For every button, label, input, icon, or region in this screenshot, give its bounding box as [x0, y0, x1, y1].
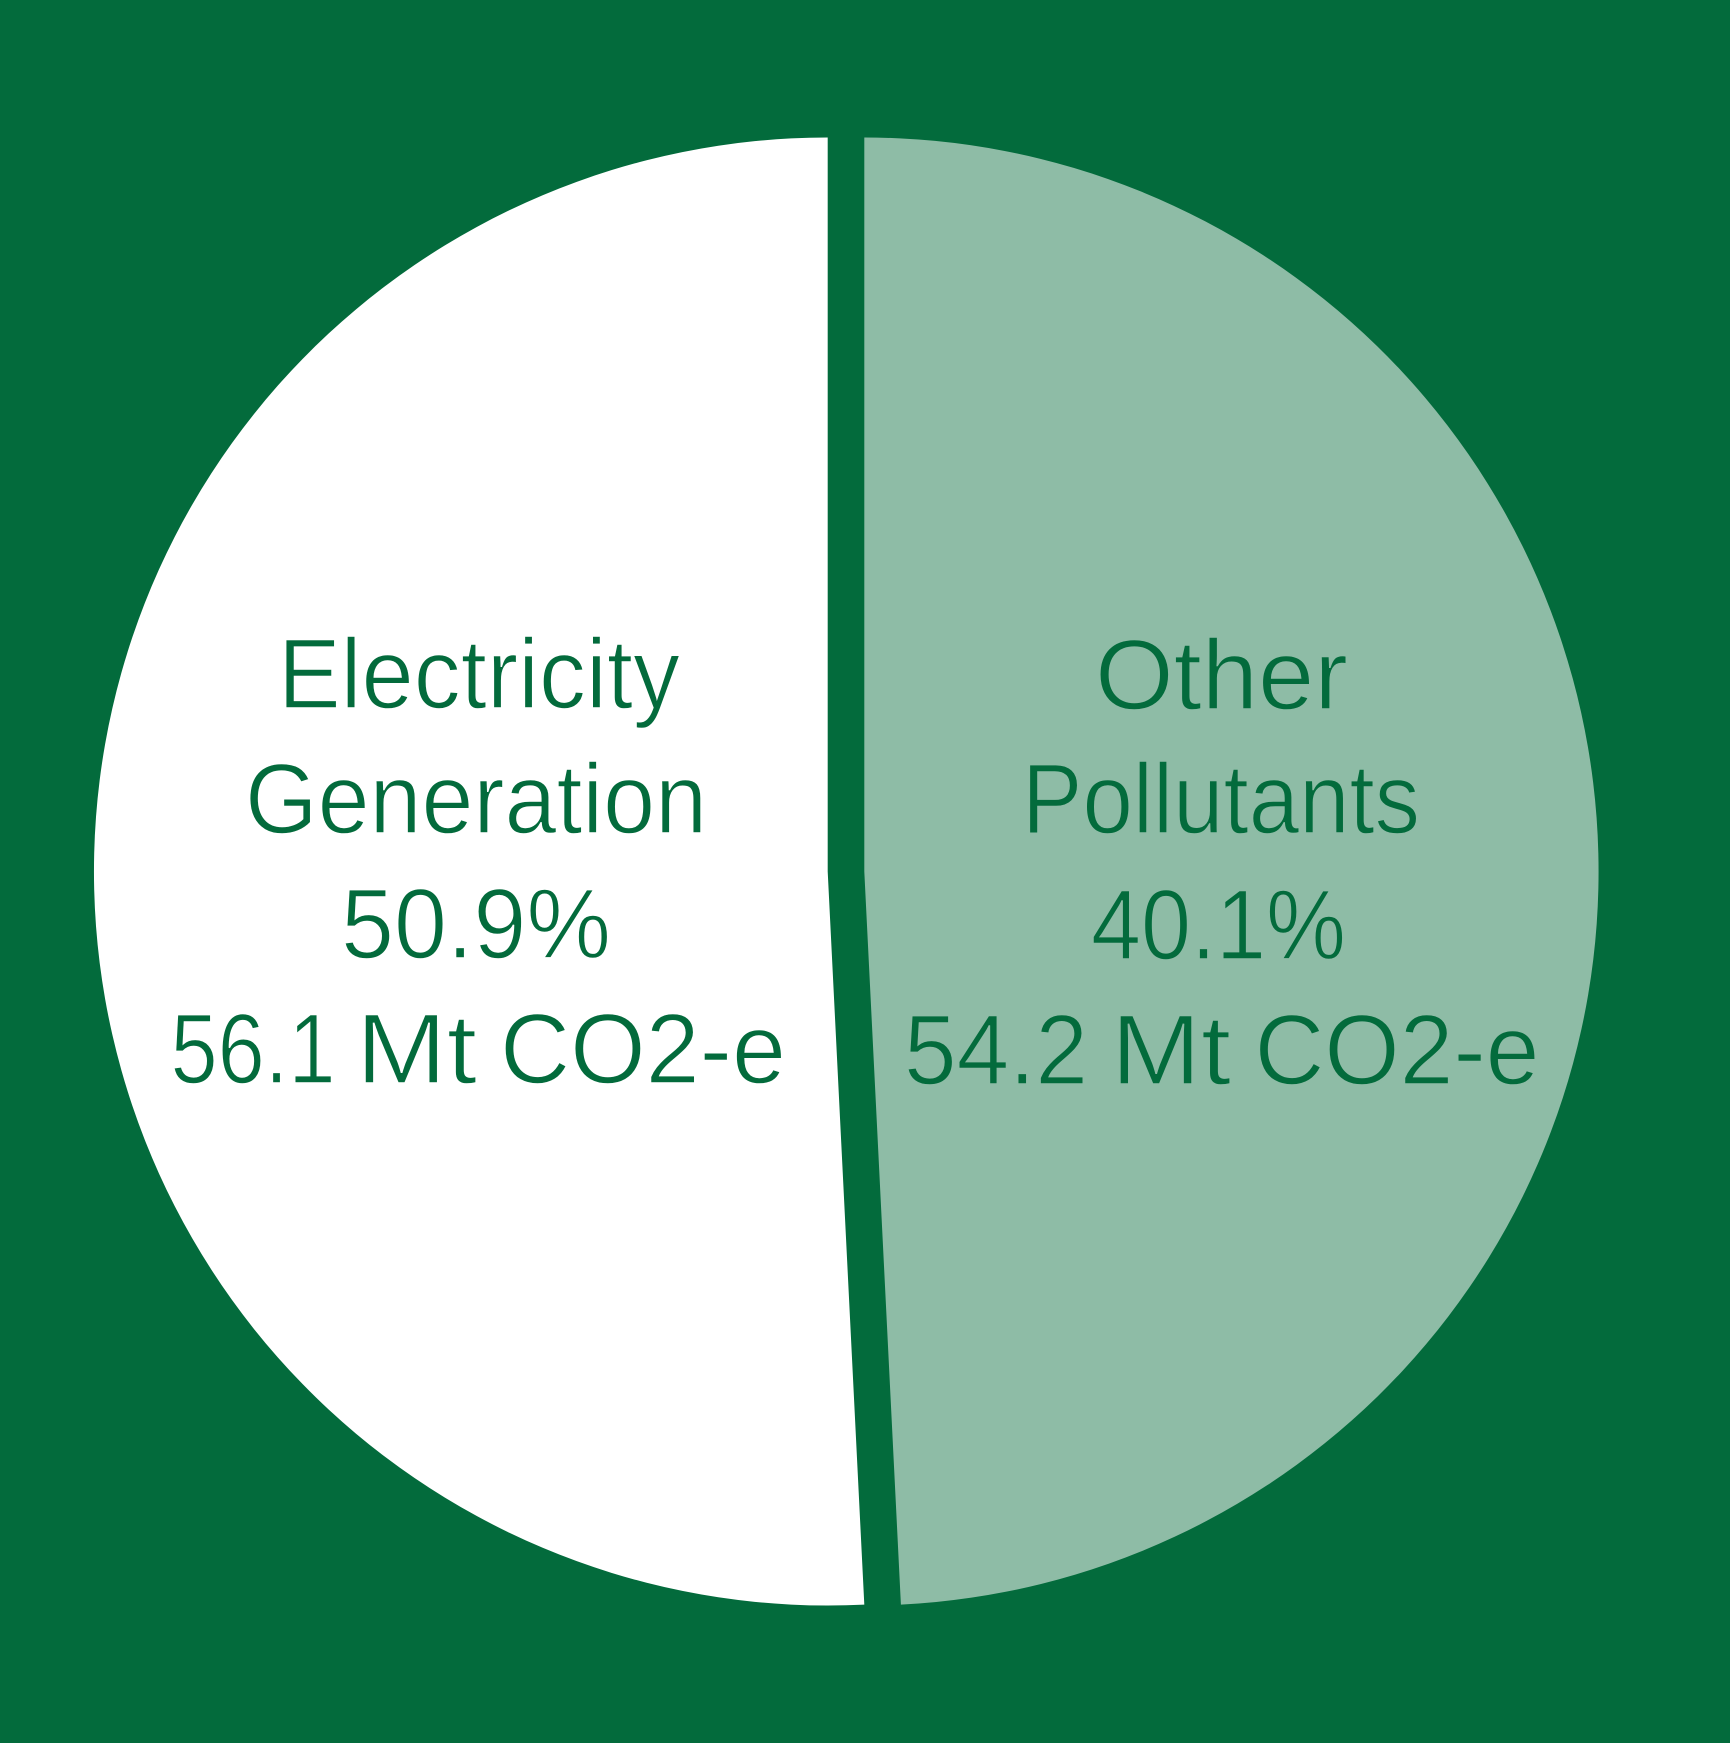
value: 54.2 Mt CO2-e [904, 994, 1540, 1105]
pie slice: electricity generation [94, 138, 864, 1605]
label: Pollutants: Pollutants [1022, 743, 1420, 854]
value: 54.2 Mt CO2-e: CO2-e [1254, 994, 1540, 1105]
value: 56.1 Mt CO2-e: 56.1 [170, 993, 336, 1104]
value: 56.1 Mt CO2-e: Mt [356, 993, 477, 1104]
value: 56.1 Mt CO2-e: CO2-e [500, 993, 786, 1104]
label: Electricity: Electricity [278, 618, 680, 729]
value: 54.2 Mt CO2-e: 54.2 [904, 994, 1088, 1105]
value: 56.1 Mt CO2-e [170, 993, 786, 1104]
value: 54.2 Mt CO2-e: Mt [1111, 994, 1231, 1105]
value: 50.9%: 50.9% [341, 868, 611, 979]
label: Other: Other [1095, 619, 1348, 730]
pie slice: other pollutants [864, 137, 1599, 1605]
value: 40.1%: 40.1% [1091, 869, 1346, 980]
label: Generation: Generation [245, 743, 707, 854]
